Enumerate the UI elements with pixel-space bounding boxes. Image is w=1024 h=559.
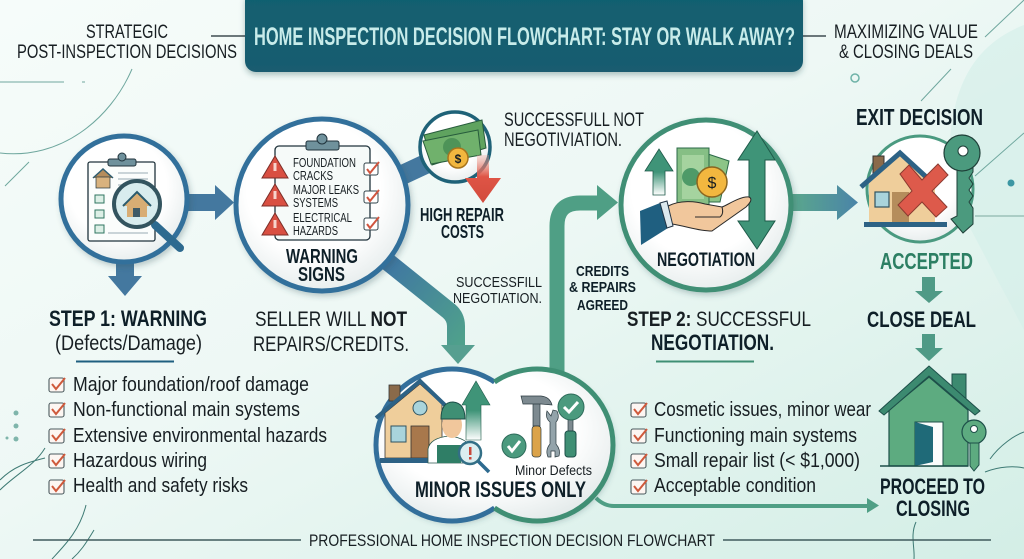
warning signs label: WARNING bbox=[286, 246, 358, 268]
checklist: walk-away defects: Hazardous wiring bbox=[73, 450, 207, 472]
warning list: SYSTEMS bbox=[293, 195, 338, 210]
icon: house bbox=[861, 153, 947, 227]
checklist: acceptable items: Cosmetic issues, minor wear bbox=[654, 399, 871, 421]
heading: step 2 bbox=[627, 308, 811, 362]
icon: green up arrow bbox=[462, 381, 490, 440]
icon: red x bbox=[898, 164, 948, 217]
connector: warning signs to high repair costs bbox=[398, 152, 432, 186]
minor issues only label: MINOR ISSUES ONLY bbox=[415, 477, 586, 502]
circle: negotiation bbox=[621, 120, 791, 290]
icon: banknotes: $ bbox=[455, 152, 462, 166]
proceed to closing label bbox=[880, 474, 985, 521]
icon: hammer bbox=[521, 396, 552, 457]
icon: wrench bbox=[546, 410, 560, 457]
checklist: acceptable items: Acceptable condition bbox=[654, 475, 816, 497]
arrow: step 1 down bbox=[108, 262, 142, 296]
arrow: accepted to close deal bbox=[915, 277, 943, 303]
icon: banknotes and coin bbox=[677, 148, 729, 205]
icon: check badge left bbox=[502, 434, 526, 458]
arrow: step 1 to warning signs bbox=[186, 185, 234, 220]
icon: closing house bbox=[879, 366, 986, 471]
high repair costs label: HIGH REPAIR bbox=[420, 205, 504, 225]
icon: magnifier bbox=[114, 181, 180, 248]
note: unsuccessful negotiation: NEGOTIVIATION. bbox=[504, 130, 622, 151]
icon: banknotes and coin: $ bbox=[708, 175, 717, 192]
circle: inspection clipboard bbox=[61, 136, 187, 262]
text: seller refusal: REPAIRS/CREDITS. bbox=[253, 333, 409, 356]
text: seller refusal: SELLER WILL NOT bbox=[255, 308, 407, 331]
icon: warning clipboard bbox=[262, 134, 379, 240]
footer caption: PROFESSIONAL HOME INSPECTION DECISION FLOWCHART bbox=[309, 531, 715, 550]
icon: clipboard bbox=[88, 153, 155, 241]
text: seller refusal bbox=[253, 308, 409, 356]
warning signs label bbox=[286, 246, 358, 286]
left tagline: POST-INSPECTION DECISIONS bbox=[17, 42, 237, 63]
proceed to closing label: CLOSING bbox=[896, 496, 970, 521]
credits and repairs agreed label: CREDITS bbox=[576, 263, 629, 280]
icon: inspector bbox=[428, 402, 489, 472]
high repair costs label: COSTS bbox=[441, 222, 484, 242]
left tagline bbox=[17, 22, 245, 63]
checklist: walk-away defects: Major foundation/roof damage bbox=[73, 374, 309, 396]
circle: minor issues only bbox=[376, 369, 613, 521]
proceed to closing label: PROCEED TO bbox=[880, 474, 985, 499]
close deal label: CLOSE DEAL bbox=[867, 307, 976, 332]
icon: key bbox=[962, 420, 986, 471]
arrow: minor issues to proceed to closing bbox=[596, 498, 879, 513]
heading: step 1 bbox=[49, 306, 207, 362]
icon: open hand bbox=[640, 197, 751, 245]
warning list bbox=[293, 155, 359, 238]
heading: step 1: (Defects/Damage) bbox=[55, 332, 202, 355]
negotiation label: NEGOTIATION bbox=[657, 250, 755, 271]
checklist: walk-away defects: Health and safety risks bbox=[73, 475, 248, 497]
note: successful negotiation: SUCCESSFILL bbox=[456, 274, 542, 291]
note: successful negotiation: NEGOTIATION. bbox=[453, 290, 542, 307]
circle: high repair costs money bbox=[420, 112, 501, 203]
checklist: walk-away defects: Non-functional main systems bbox=[73, 399, 300, 421]
warning list: MAJOR LEAKS bbox=[293, 182, 359, 197]
icon: screwdriver and check badge bbox=[558, 394, 584, 457]
note: unsuccessful negotiation: SUCCESSFULL NOT bbox=[504, 110, 644, 131]
warning list: FOUNDATION bbox=[293, 155, 356, 170]
right tagline: MAXIMIZING VALUE bbox=[834, 22, 978, 43]
icon: key bbox=[944, 135, 980, 233]
warning list: HAZARDS bbox=[293, 223, 338, 238]
accepted label: ACCEPTED bbox=[880, 248, 973, 274]
credits and repairs agreed label bbox=[569, 263, 636, 314]
warning signs label: SIGNS bbox=[298, 264, 345, 286]
title banner bbox=[245, 0, 803, 72]
checklist: acceptable items: Small repair list (< $1,000) bbox=[654, 450, 860, 472]
circle: exit decision bbox=[861, 135, 980, 242]
heading: step 1: STEP 1: WARNING bbox=[49, 306, 207, 331]
heading: step 2: NEGOTIATION. bbox=[651, 330, 774, 355]
credits and repairs agreed label: & REPAIRS bbox=[569, 279, 636, 296]
circle: warning signs bbox=[236, 119, 408, 291]
left tagline: STRATEGIC bbox=[86, 22, 168, 43]
warning list: CRACKS bbox=[293, 168, 333, 183]
minor defects label: Minor Defects bbox=[515, 462, 592, 478]
checklist: walk-away defects: Extensive environmental hazards bbox=[73, 425, 327, 447]
right tagline: & CLOSING DEALS bbox=[839, 42, 973, 63]
arrow: warning signs to minor issues bbox=[388, 262, 475, 364]
right tagline bbox=[803, 22, 978, 63]
warning list: ELECTRICAL bbox=[293, 210, 352, 225]
exit decision label: EXIT DECISION bbox=[856, 104, 983, 130]
icon: up arrow bbox=[645, 149, 673, 195]
arrow: minor issues up to negotiation bbox=[557, 185, 618, 372]
arrow: negotiation to exit decision bbox=[790, 185, 858, 220]
icon: red down arrow bbox=[465, 155, 501, 203]
icon: house bbox=[376, 381, 448, 463]
high repair costs label bbox=[420, 205, 504, 242]
arrow: close deal to home bbox=[915, 334, 943, 361]
note: unsuccessful negotiation bbox=[504, 110, 644, 151]
credits and repairs agreed label: AGREED bbox=[577, 297, 628, 314]
icon: double arrow bbox=[738, 131, 775, 249]
checklist: walk-away defects bbox=[49, 374, 327, 497]
heading: step 2: STEP 2: SUCCESSFUL bbox=[627, 308, 811, 331]
checklist: acceptable items: Functioning main systems bbox=[654, 425, 857, 447]
note: successful negotiation bbox=[453, 274, 542, 307]
checklist: acceptable items bbox=[631, 399, 871, 497]
